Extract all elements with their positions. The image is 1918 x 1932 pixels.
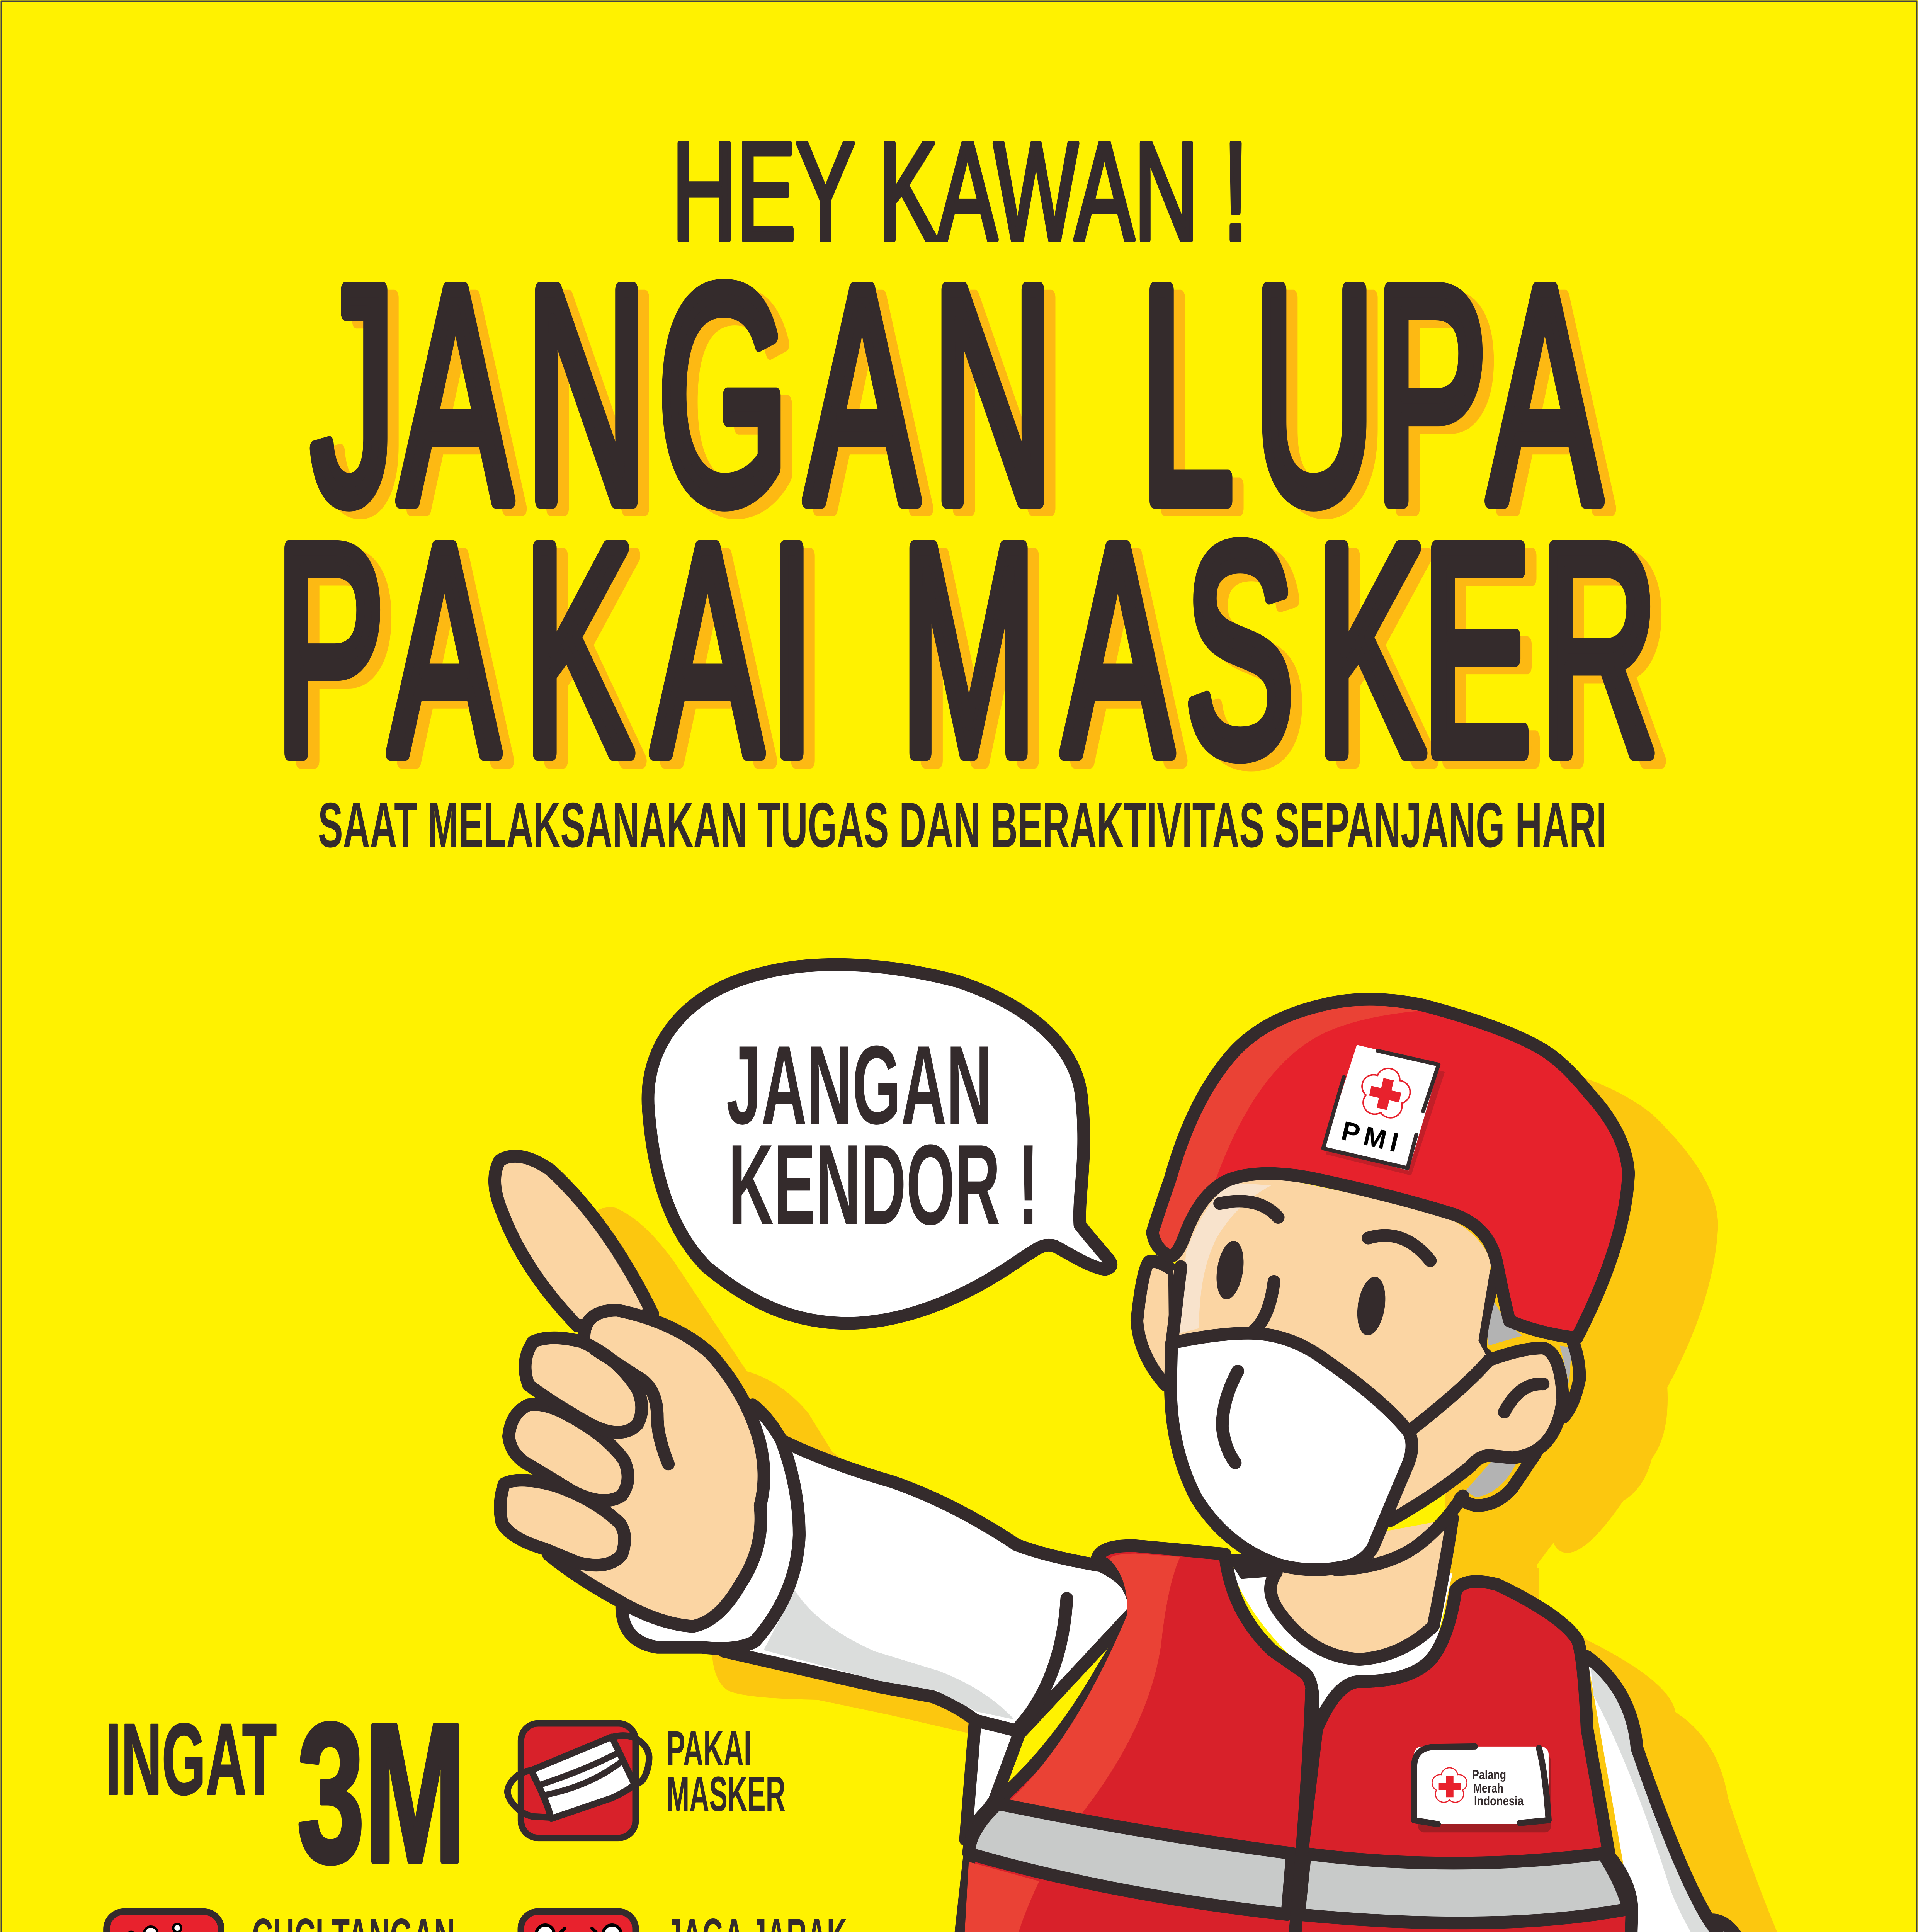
reflective stripe left <box>969 1804 1292 1915</box>
forehead highlight <box>1180 1183 1272 1333</box>
icon: hand washing <box>107 1912 221 1932</box>
icon tile <box>107 1912 221 1932</box>
vest centre seam <box>1287 1690 1317 1932</box>
left arm and hand <box>495 1156 1135 1732</box>
badge card <box>1414 1747 1549 1824</box>
nose <box>1251 1281 1274 1333</box>
right sleeve outline <box>1587 1656 1756 1932</box>
mask strap <box>1409 1360 1489 1432</box>
bubble text line 1: JANGAN <box>726 1022 992 1148</box>
vest name badge <box>1414 1747 1551 1832</box>
character: volunteer <box>495 999 1886 1932</box>
torso and right arm <box>1012 1656 1886 1932</box>
main title <box>275 223 1669 825</box>
helmet badge <box>1323 1045 1445 1175</box>
chin line <box>1336 1496 1463 1570</box>
face edge <box>1172 1267 1181 1345</box>
under chin <box>1225 1554 1280 1579</box>
title shadow line 2: PAKAI MASKER <box>286 491 1669 825</box>
3M label: 3M <box>297 1682 466 1903</box>
face <box>1170 1177 1561 1577</box>
hair outlines <box>1460 1272 1580 1506</box>
index finger <box>495 1156 653 1326</box>
finger one <box>525 1338 642 1432</box>
sleeve fold <box>1020 1599 1067 1726</box>
soap bubbles <box>127 1924 181 1932</box>
pakai masker label <box>667 1721 786 1822</box>
icon: mask <box>507 1723 649 1838</box>
neck <box>1267 1518 1456 1658</box>
ear loops <box>507 1736 649 1817</box>
title shadow line 1: JANGAN LUPA <box>323 231 1613 574</box>
badge outline <box>1414 1747 1549 1824</box>
icon tile <box>521 1912 636 1932</box>
left brow <box>1220 1201 1278 1218</box>
helmet highlight <box>1153 1002 1424 1254</box>
sleeve cuff <box>622 1405 799 1648</box>
person left head <box>536 1925 554 1932</box>
left sleeve shade <box>764 1590 1014 1719</box>
helmet text: PMI <box>1339 1116 1406 1159</box>
badge text: Merah <box>1473 1781 1503 1795</box>
sleeve shadow <box>712 1645 1021 1734</box>
right ear and jaw outline <box>1391 1348 1563 1520</box>
badge text: Indonesia <box>1474 1794 1524 1808</box>
face mask <box>1170 1333 1412 1570</box>
grey hair lower <box>1466 1461 1517 1497</box>
reflective stripe right <box>1299 1854 1629 1923</box>
bubble text line 2: KENDOR ! <box>728 1121 1039 1248</box>
finger three <box>500 1480 625 1565</box>
badge outline <box>1323 1051 1438 1168</box>
badge card <box>1323 1045 1440 1170</box>
ingat label: INGAT <box>105 1702 277 1816</box>
mask fold <box>1222 1371 1238 1463</box>
mask body <box>531 1737 634 1819</box>
palm <box>549 1310 764 1626</box>
title line 2: PAKAI MASKER <box>275 483 1658 817</box>
collar edges <box>1225 1554 1456 1729</box>
pakai masker label: PAKAI <box>667 1721 752 1776</box>
left sleeve <box>724 1413 1135 1732</box>
helmet outline <box>1153 999 1629 1338</box>
badge text <box>1472 1767 1524 1808</box>
body shadow <box>1529 1568 1914 1932</box>
helmet logo <box>1356 1063 1415 1121</box>
left eye <box>1213 1239 1247 1301</box>
mask pleats <box>539 1752 623 1796</box>
vest highlight lower <box>960 1862 1039 1932</box>
vest body <box>952 1546 1632 1932</box>
finger shadow <box>593 1207 852 1476</box>
right eye <box>1353 1275 1389 1337</box>
right sleeve <box>1587 1656 1756 1932</box>
right brow <box>1368 1235 1430 1261</box>
ingat 3m panel <box>105 1682 920 1932</box>
badge shadow <box>1326 1049 1445 1175</box>
neck outline <box>1270 1518 1452 1660</box>
person right head <box>603 1925 621 1932</box>
badge shadow <box>1418 1755 1551 1832</box>
bubble shape <box>648 964 1111 1323</box>
heading: hey kawan: HEY KAWAN ! <box>672 113 1248 269</box>
grey hair top <box>1487 1301 1522 1345</box>
shirt collar <box>1231 1568 1452 1729</box>
left ear <box>1137 1261 1176 1385</box>
character shadow <box>593 1075 1914 1932</box>
vest <box>952 1518 1632 1932</box>
right sleeve shade <box>1590 1662 1751 1932</box>
finger two <box>508 1405 628 1501</box>
speech bubble <box>648 964 1111 1323</box>
shirt under arm <box>966 1720 1020 1840</box>
pakai masker label: MASKER <box>667 1767 786 1822</box>
thumb line <box>595 1350 668 1464</box>
vest highlight upper <box>1010 1554 1180 1815</box>
head shadow <box>1445 1075 1718 1656</box>
head <box>1137 999 1629 1577</box>
badge text: Palang <box>1472 1767 1506 1782</box>
ear detail <box>1504 1384 1543 1412</box>
icon: physical distance <box>521 1912 636 1932</box>
grey hair side <box>1560 1345 1571 1385</box>
title line 1: JANGAN LUPA <box>311 223 1602 566</box>
helmet <box>1153 999 1629 1338</box>
icon tile <box>521 1723 636 1838</box>
badge logo <box>1432 1768 1467 1802</box>
distance arrow <box>559 1928 598 1932</box>
